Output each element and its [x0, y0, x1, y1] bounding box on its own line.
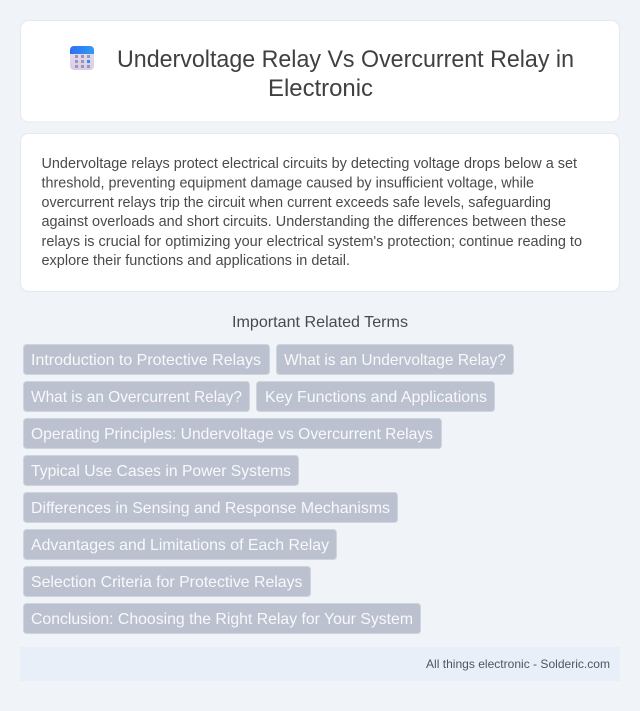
title [117, 46, 574, 102]
footer: All things electronic - Solderic.com [426, 657, 610, 671]
tag: differences: Differences in Sensing and Response Mechanisms [31, 500, 390, 517]
text block: summary: relays is crucial for optimizing your electrical system's protection; continue reading to [42, 234, 582, 250]
text block: summary: overcurrent relays trip the circuit when current exceeds safe levels, safeguarding [42, 195, 551, 211]
tag: advantages [24, 530, 336, 560]
panel: summary text card [20, 134, 620, 292]
tag: undervoltage relay: What is an Undervoltage Relay? [284, 352, 506, 369]
tag: introduction: Introduction to Protective Relays [31, 352, 261, 369]
panel: related term tags [24, 344, 514, 634]
tag: operating principles [24, 418, 442, 448]
heading: related terms: Important Related Terms [232, 314, 408, 331]
text block: summary: threshold, preventing equipment damage caused by insufficient voltage, while [42, 176, 534, 192]
tag: selection criteria [24, 566, 310, 596]
panel: header card [20, 20, 620, 122]
tag: typical use cases [24, 456, 298, 486]
footer [20, 647, 620, 681]
tag: differences [24, 492, 398, 522]
tag: overcurrent relay: What is an Overcurrent Relay? [31, 389, 242, 406]
tag: overcurrent relay [24, 382, 250, 412]
tag: selection criteria: Selection Criteria for Protective Relays [31, 574, 302, 591]
text block: summary: against overloads and short circuits. Understanding the differences between these [42, 214, 566, 230]
text block: summary [42, 156, 582, 269]
title: Undervoltage Relay Vs Overcurrent Relay in [117, 46, 574, 73]
tag: advantages: Advantages and Limitations of Each Relay [31, 537, 329, 554]
tag: undervoltage relay [276, 344, 514, 374]
icon: calendar [70, 46, 94, 70]
title: Electronic [268, 75, 373, 102]
tag: key functions: Key Functions and Applications [265, 389, 487, 406]
text block: summary: explore their functions and applications in detail. [42, 253, 350, 269]
tag: operating principles: Operating Principles: Undervoltage vs Overcurrent Relays [31, 426, 433, 443]
tag: typical use cases: Typical Use Cases in Power Systems [31, 463, 291, 480]
tag: key functions [256, 382, 494, 412]
text block: summary: Undervoltage relays protect electrical circuits by detecting voltage drops below a set [42, 156, 577, 172]
tag: introduction [24, 344, 270, 374]
tag: conclusion [24, 604, 420, 634]
tag: conclusion: Conclusion: Choosing the Right Relay for Your System [31, 611, 413, 628]
